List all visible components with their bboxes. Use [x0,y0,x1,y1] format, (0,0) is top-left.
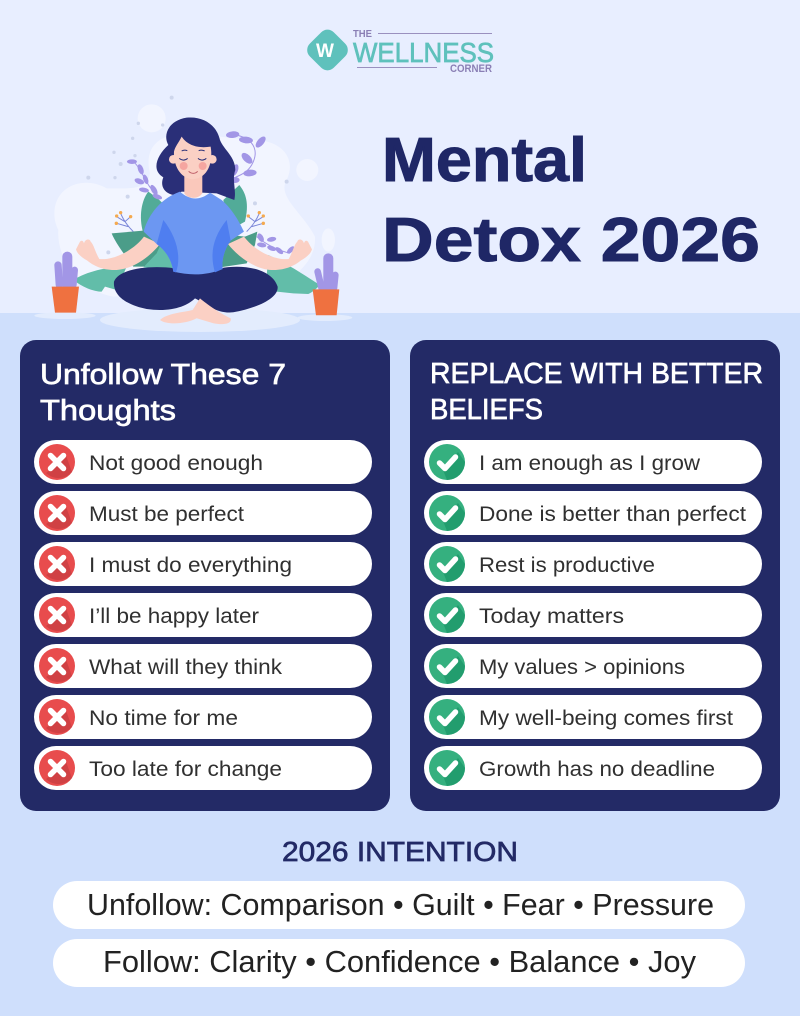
pill: follow list [53,939,745,987]
item: No time for me: No time for me [89,706,238,730]
item: My well-being comes first [424,695,762,739]
arms [76,237,312,270]
item: My values > opinions: My values > opinions [479,655,685,679]
item: Must be perfect: Must be perfect [89,502,244,526]
panel heading [40,359,286,427]
floor shadows [34,308,352,332]
item: I'll be happy later [34,593,372,637]
sprigs [115,211,265,232]
item: I am enough as I grow [424,440,762,484]
illustration: meditating woman [34,96,352,332]
title [382,126,760,275]
feet [160,298,231,324]
pill: unfollow list: Unfollow: Comparison • Guilt • Fear • Pressure [87,887,714,922]
item: Must be perfect [34,491,372,535]
item: I am enough as I grow: I am enough as I grow [479,451,700,475]
panel: better beliefs [410,340,780,811]
item: Rest is productive: Rest is productive [479,553,655,577]
hair [156,117,235,200]
item: Too late for change [34,746,372,790]
pill: follow list: Follow: Clarity • Confidence • Balance • Joy [103,944,696,979]
logo wordmark [353,29,494,75]
item: Today matters: Today matters [479,604,624,628]
legs [114,267,278,312]
pill: unfollow list [53,881,745,929]
icon: logo badge [303,26,352,74]
item: Today matters [424,593,762,637]
item: Rest is productive [424,542,762,586]
panel: unfollow thoughts [20,340,390,811]
item: Done is better than perfect [424,491,762,535]
logo wordmark: CORNER [450,63,492,75]
item: Not good enough [34,440,372,484]
potted plants [52,257,339,315]
title: Detox 2026 [382,206,760,275]
panel heading: Thoughts [40,395,176,427]
item: Growth has no deadline [424,746,762,790]
logo wordmark: THE [353,29,372,40]
vines [127,131,296,255]
dots [86,96,289,254]
logo [303,26,494,75]
item: My well-being comes first: My well-being comes first [479,706,733,730]
heading: 2026 intention: 2026 INTENTION [282,836,518,867]
logo wordmark: WELLNESS [353,37,494,68]
item: Done is better than perfect: Done is better than perfect [479,502,746,526]
panel heading: Unfollow These 7 [40,359,286,391]
background clouds [54,104,335,297]
item: Not good enough: Not good enough [89,451,263,475]
item: What will they think [34,644,372,688]
item: No time for me [34,695,372,739]
panel heading [430,358,763,426]
item: Too late for change: Too late for change [89,757,282,781]
neck and face [169,137,217,198]
item: I must do everything: I must do everything [89,553,292,577]
item: I must do everything [34,542,372,586]
title: Mental [382,126,587,195]
icon: logo badge: W [316,41,334,62]
shirt [144,192,244,274]
panel heading: BELIEFS [430,394,543,426]
item: I'll be happy later: I’ll be happy later [89,604,259,628]
item: My values > opinions [424,644,762,688]
leaves [73,185,320,294]
item: Growth has no deadline: Growth has no deadline [479,757,715,781]
panel heading: REPLACE WITH BETTER [430,358,763,390]
item: What will they think: What will they think [89,655,282,679]
